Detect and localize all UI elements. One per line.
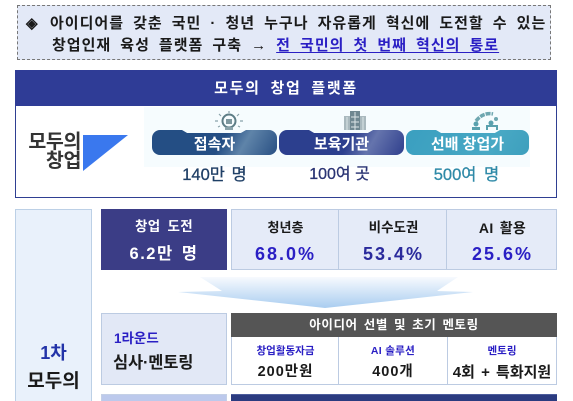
region value: 53.4% xyxy=(363,244,424,264)
stage number: 1차 xyxy=(40,343,67,363)
stats table xyxy=(231,209,557,270)
panel: round 1 details xyxy=(231,313,557,385)
icon: building xyxy=(344,111,366,130)
panel: round 2 label xyxy=(101,394,227,401)
icon band xyxy=(144,107,530,167)
panel heading xyxy=(15,70,557,106)
callout line 2: 창업인재 육성 플랫폼 구축 → 전 국민의 첫 번째 혁신의 통로 xyxy=(52,37,499,54)
value: senior founders: 500여 명 xyxy=(434,166,499,184)
youth label: 청년층 xyxy=(268,220,303,235)
panel: round 2 details heading xyxy=(231,394,557,401)
logo wordmark: 모두의 xyxy=(28,131,81,153)
icon: mentors xyxy=(472,112,498,130)
AI value: 25.6% xyxy=(472,244,533,264)
logo xyxy=(28,131,128,172)
pill: senior founders: 선배 창업가 xyxy=(431,136,504,153)
logo triangle xyxy=(83,135,128,171)
detail: mentoring xyxy=(452,345,551,381)
panel: stage 1 label xyxy=(15,209,92,401)
icon: light bulb xyxy=(215,111,243,130)
AI solutions value: 400개 xyxy=(372,364,414,380)
details heading xyxy=(231,313,557,337)
pill: visitors: 접속자 xyxy=(194,136,235,153)
stat: AI use xyxy=(472,220,533,264)
stat: non-capital region xyxy=(339,210,447,269)
arrow: down funnel xyxy=(179,277,472,308)
icon: diamond bullet: ◈ xyxy=(26,15,38,32)
pill: incubators xyxy=(279,130,404,155)
pill: incubators: 보육기관 xyxy=(314,136,369,153)
mentoring value: 4회 + 특화지원 xyxy=(453,364,551,381)
region label: 비수도권 xyxy=(369,220,418,235)
youth value: 68.0% xyxy=(255,244,316,264)
round number: 1라운드 xyxy=(114,331,159,346)
details heading: 아이디어 선별 및 초기 멘토링 xyxy=(309,318,479,332)
funding value: 200만원 xyxy=(258,364,313,380)
detail: funding xyxy=(232,337,339,384)
panel: challengers xyxy=(101,209,227,270)
value: visitors: 140만 명 xyxy=(182,166,247,184)
panel heading: 모두의 창업 플랫폼 xyxy=(214,80,358,97)
AI label: AI 활용 xyxy=(479,220,526,236)
callout line 1: 아이디어를 갖춘 국민 · 청년 누구나 자유롭게 혁신에 도전할 수 있는 xyxy=(50,15,546,32)
callout: platform summary xyxy=(17,5,551,60)
pill: visitors xyxy=(152,130,277,155)
challengers label: 창업 도전 xyxy=(135,219,193,234)
mentoring label: 멘토링 xyxy=(488,345,516,357)
AI solutions label: AI 솔루션 xyxy=(371,345,415,357)
pill: senior founders xyxy=(406,130,529,155)
challengers number: 6.2만 명 xyxy=(130,245,198,263)
panel: round 1 label xyxy=(101,313,227,385)
funding label: 창업활동자금 xyxy=(257,345,314,357)
panel: platform xyxy=(15,70,557,198)
stat: youth xyxy=(232,210,339,269)
logo wordmark xyxy=(28,131,81,172)
detail: AI solutions xyxy=(339,337,448,384)
logo wordmark: 창업 xyxy=(46,150,81,172)
round title: 심사·멘토링 xyxy=(113,354,193,372)
value: incubators: 100여 곳 xyxy=(309,166,370,183)
stage name: 모두의 xyxy=(27,371,80,392)
